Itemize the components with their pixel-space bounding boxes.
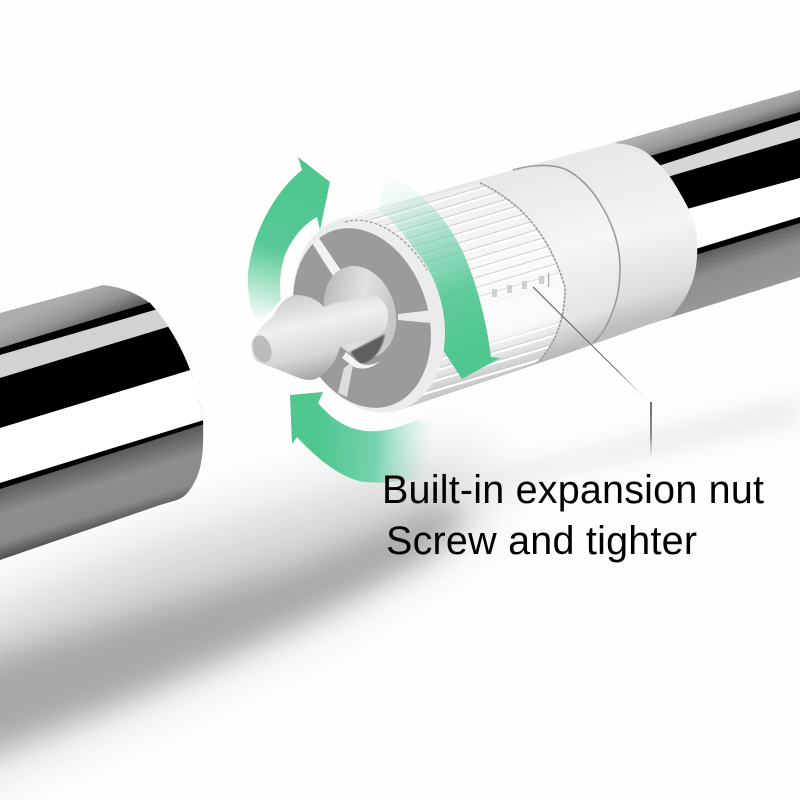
sleeve seam [513,165,620,343]
centre hub [312,256,408,368]
knurled ring [338,186,565,407]
collar sleeve [337,143,697,410]
caption line 2: Screw and tighter [386,519,697,563]
nut body and collar [330,143,697,420]
nut front face [269,197,469,433]
caption [382,468,764,563]
hub hole [350,334,385,364]
slit top [312,238,344,279]
slit bottom [338,360,354,397]
hub lip [342,352,380,369]
arrow: lower rotation [290,392,440,482]
floor shadow [0,398,800,790]
inner sleeve [337,165,620,410]
expansion pin [249,295,388,380]
grey annulus [271,210,453,426]
right chrome tube [600,90,800,327]
indicator marks [492,273,549,297]
caption line 1: Built-in expansion nut [382,468,764,512]
slit right [398,309,444,335]
left chrome tube [0,285,204,560]
knurl edge line [480,183,565,363]
pin tip [249,333,275,365]
face rim [269,197,469,433]
arrow: rotation over the nut [378,172,500,379]
leader line [533,287,651,460]
arrow: upper left rotation [248,157,330,325]
rim dashed edge [345,220,427,270]
